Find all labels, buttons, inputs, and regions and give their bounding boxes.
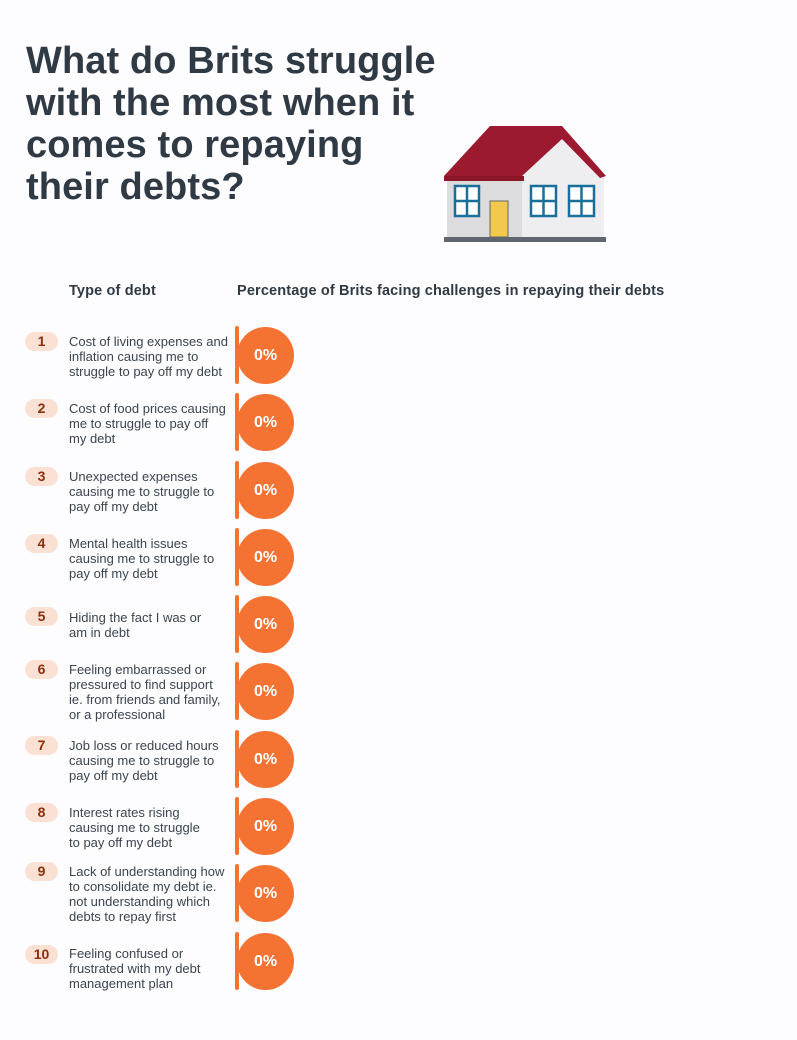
row 10: management plan	[69, 976, 173, 991]
row 4: 0%	[254, 549, 277, 566]
row 10: 0%	[254, 953, 277, 970]
row 6: 0%	[254, 683, 277, 700]
row 3: Unexpected expenses	[69, 469, 198, 484]
row 7: 0%	[254, 751, 277, 768]
row 1: 0%	[254, 347, 277, 364]
row 2: 2	[38, 400, 45, 416]
row 8: to pay off my debt	[69, 835, 172, 850]
row 2	[25, 393, 294, 451]
row 10: Feeling confused or	[69, 946, 183, 961]
row 5	[25, 595, 294, 653]
row 2: me to struggle to pay off	[69, 416, 208, 431]
row 1: struggle to pay off my debt	[69, 364, 222, 379]
title	[26, 40, 436, 208]
row 4: pay off my debt	[69, 566, 158, 581]
row 2: 0%	[254, 414, 277, 431]
row 9	[25, 862, 294, 924]
row 10	[25, 932, 294, 991]
row 8: Interest rates rising	[69, 805, 180, 820]
row 1	[25, 326, 294, 384]
row 5: 5	[38, 608, 45, 624]
row 8: 8	[38, 804, 45, 820]
row 3	[25, 461, 294, 519]
row 8: causing me to struggle	[69, 820, 200, 835]
row 3: 3	[38, 468, 45, 484]
row 3: pay off my debt	[69, 499, 158, 514]
row 10: frustrated with my debt	[69, 961, 200, 976]
row 5: Hiding the fact I was or	[69, 610, 201, 625]
row 8: 0%	[254, 818, 277, 835]
row 4: causing me to struggle to	[69, 551, 214, 566]
row 6: pressured to find support	[69, 677, 213, 692]
row 5: am in debt	[69, 625, 130, 640]
icon: house	[444, 126, 606, 242]
row 9: not understanding which	[69, 894, 210, 909]
title: comes to repaying	[26, 124, 363, 166]
row 9: to consolidate my debt ie.	[69, 879, 216, 894]
row 6: Feeling embarrassed or	[69, 662, 206, 677]
row 3: 0%	[254, 482, 277, 499]
row 9: Lack of understanding how	[69, 864, 224, 879]
row 9: 0%	[254, 885, 277, 902]
title: their debts?	[26, 166, 245, 208]
row 9: debts to repay first	[69, 909, 176, 924]
row 2: Cost of food prices causing	[69, 401, 226, 416]
row 6: or a professional	[69, 707, 165, 722]
row 4	[25, 528, 294, 586]
row 5: 0%	[254, 616, 277, 633]
row 10: 10	[34, 946, 49, 962]
title: What do Brits struggle	[26, 40, 436, 82]
row 7: Job loss or reduced hours	[69, 738, 219, 753]
row 7: pay off my debt	[69, 768, 158, 783]
row 7: 7	[38, 737, 45, 753]
row 4: Mental health issues	[69, 536, 188, 551]
row 7	[25, 730, 294, 788]
title: with the most when it	[26, 82, 414, 124]
row 9: 9	[38, 863, 45, 879]
row 6	[25, 660, 294, 722]
row 1: Cost of living expenses and	[69, 334, 228, 349]
row 2: my debt	[69, 431, 115, 446]
row 6: ie. from friends and family,	[69, 692, 220, 707]
row 7: causing me to struggle to	[69, 753, 214, 768]
header: percentage: Percentage of Brits facing challenges in repaying their debts	[237, 283, 664, 299]
row 8	[25, 797, 294, 855]
row 1: inflation causing me to	[69, 349, 198, 364]
row 3: causing me to struggle to	[69, 484, 214, 499]
row 1: 1	[38, 333, 45, 349]
header: type of debt: Type of debt	[69, 283, 156, 299]
row 4: 4	[38, 535, 45, 551]
row 6: 6	[38, 661, 45, 677]
